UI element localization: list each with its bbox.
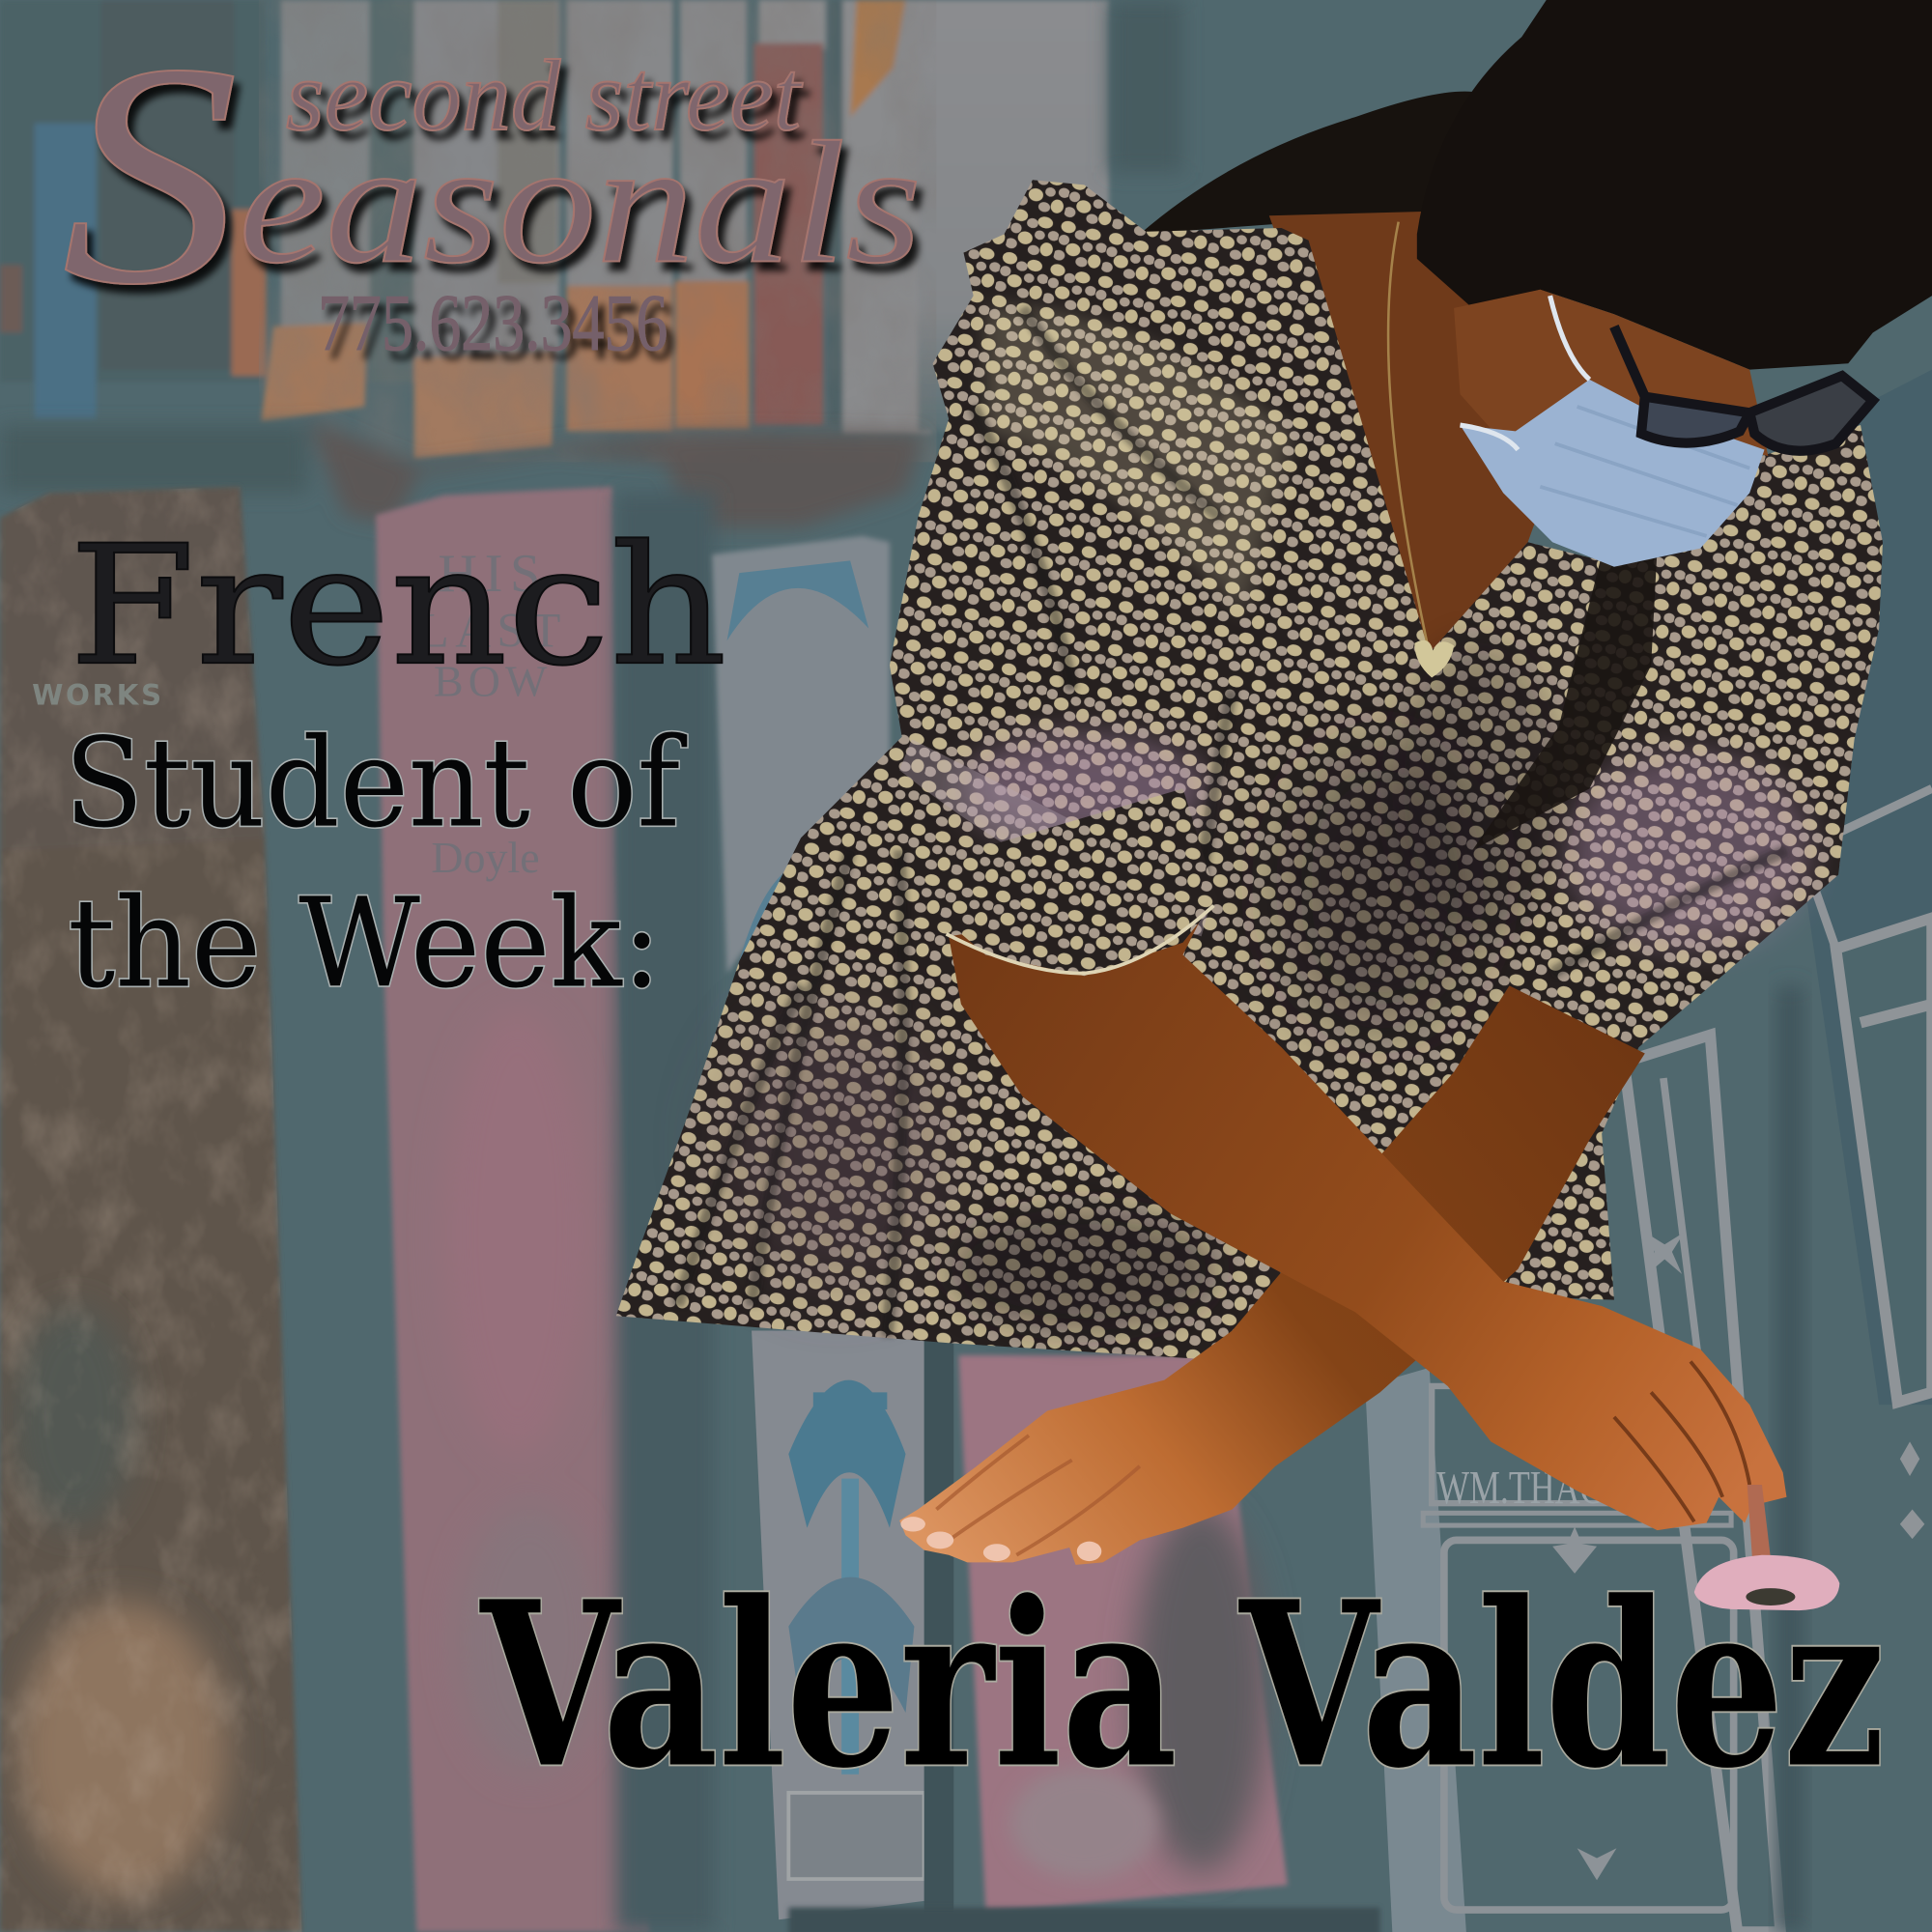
left book title fragments: WORKS bbox=[32, 679, 164, 712]
dress shading and folds bbox=[678, 307, 1811, 1337]
heading: French: French bbox=[69, 510, 727, 702]
WM. Thackeray spine label: WM.THAC bbox=[1436, 1463, 1603, 1514]
line: Student of: Student of bbox=[64, 713, 687, 856]
hair bbox=[1417, 0, 1932, 370]
light book bbox=[712, 536, 890, 974]
worn patches on left book bbox=[0, 487, 308, 1932]
left sleeve cuff bbox=[943, 788, 1217, 976]
pink book title: LAST bbox=[419, 605, 567, 659]
hair strand over chest bbox=[1472, 549, 1658, 850]
face and ear bbox=[1454, 290, 1768, 456]
person: Valeria Valdez in floral dress bbox=[616, 0, 1932, 1610]
finger creases bbox=[1614, 1361, 1749, 1521]
surgical mask bbox=[1460, 380, 1765, 567]
glasses bbox=[1614, 327, 1873, 451]
swab stick bbox=[1747, 1485, 1775, 1592]
lower pink book bbox=[958, 1355, 1288, 1913]
lower ornamented book bbox=[752, 1331, 953, 1922]
dark strip between pink and light book bbox=[616, 493, 715, 1932]
pink book title: HIS bbox=[439, 544, 548, 604]
cuff highlight bbox=[947, 906, 1213, 974]
shelf shadow band bbox=[0, 0, 1182, 527]
subheading: Student of the Week bbox=[64, 713, 687, 1015]
logo line: Seasonals: S bbox=[62, 0, 239, 351]
pink book bbox=[376, 487, 649, 1932]
logo: Second Street Seasonals bbox=[62, 0, 922, 368]
finger nails bbox=[900, 1517, 1101, 1561]
gray weathering on top books bbox=[259, 0, 936, 462]
top shelf books bbox=[0, 0, 1109, 458]
blue-gray book with frames bbox=[1365, 1035, 1780, 1932]
pink book title: BOW bbox=[434, 657, 552, 706]
flat hand finger creases bbox=[936, 1435, 1140, 1555]
chest and neck bbox=[1269, 210, 1589, 659]
hair back ponytail bbox=[1140, 92, 1516, 241]
lower pink book shadows bbox=[1010, 1503, 1269, 1879]
swab smudge bbox=[1746, 1588, 1795, 1605]
light book ornament bbox=[727, 560, 868, 961]
dark gap beside right book bbox=[1776, 985, 1804, 1932]
mask ear loop bbox=[1460, 296, 1589, 450]
back arm with flat hand bbox=[899, 985, 1645, 1565]
pink book title bbox=[419, 544, 567, 882]
heart pendant bbox=[1414, 640, 1454, 678]
right book bbox=[1802, 370, 1932, 1539]
phone number: 775.623.3456 bbox=[318, 278, 668, 368]
lower shelf shadow bbox=[788, 1907, 1380, 1932]
pink book tones bbox=[443, 1010, 604, 1775]
lower left brown book bbox=[0, 487, 301, 1932]
line: the Week: the Week: bbox=[68, 872, 662, 1015]
mask pleats bbox=[1540, 407, 1749, 536]
logo line: Seasonals: easonals bbox=[239, 106, 922, 299]
necklace bbox=[1388, 222, 1430, 653]
pink disc bbox=[1694, 1555, 1839, 1610]
pink book title: Doyle bbox=[431, 833, 540, 882]
front arm with hand holding swab bbox=[949, 894, 1786, 1530]
logo line: second street: second street bbox=[286, 40, 804, 152]
dress bbox=[616, 180, 1883, 1359]
